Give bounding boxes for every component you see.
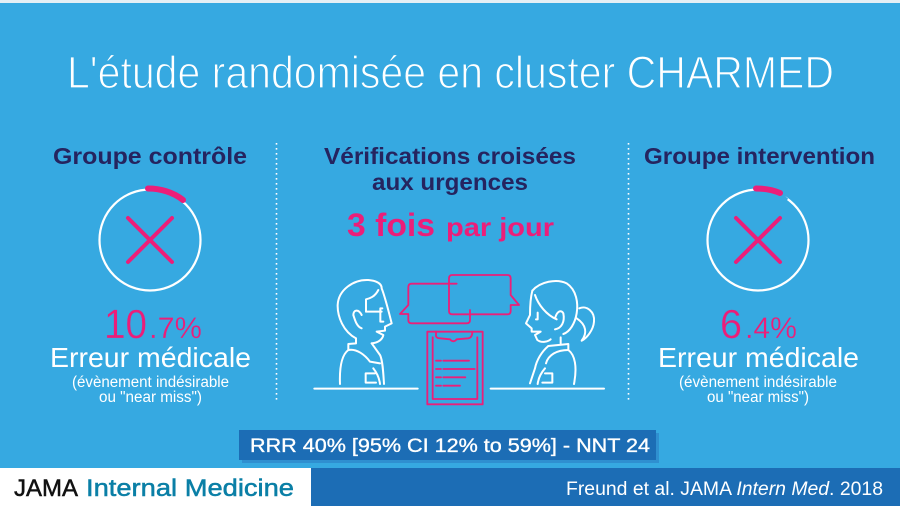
- stat: 6.4%: 6: [720, 301, 742, 347]
- note: adverse event or near miss: (évènement indésirable: [72, 374, 229, 391]
- stat: 10.7%: .7%: [149, 312, 202, 345]
- panel: cross-checks: [314, 143, 604, 404]
- heading: intervention group: Groupe intervention: [644, 143, 875, 169]
- note: adverse event or near miss: ou "near miss"): [707, 389, 809, 406]
- heading: cross-checks in the ED: Vérifications croisées: [324, 143, 576, 169]
- panel: control group: [50, 143, 251, 406]
- icon: intervention circle with cross: [708, 188, 808, 290]
- heading: cross-checks in the ED: aux urgences: [372, 169, 528, 195]
- journal name: JAMA: [14, 475, 78, 502]
- heading: control group: Groupe contrôle: [53, 143, 247, 169]
- note: adverse event or near miss: [679, 374, 837, 406]
- label: medical error: Erreur médicale: [50, 342, 251, 373]
- icon: female clinician: [491, 281, 604, 389]
- title: L'étude randomisée en cluster CHARMED: [67, 47, 834, 98]
- stat: 6.4%: .4%: [745, 312, 797, 345]
- note: adverse event or near miss: ou "near miss"): [99, 389, 202, 406]
- stat: 6.4%: [720, 301, 797, 347]
- icon: male clinician: [314, 280, 418, 389]
- note: adverse event or near miss: [72, 374, 229, 406]
- stat: 10.7%: 10: [104, 301, 147, 347]
- citation: Freund et al. JAMA Intern Med. 2018: [566, 479, 883, 500]
- journal name: Internal Medicine: [86, 475, 294, 502]
- frequency: 3 times a day: 3 fois: [347, 207, 435, 243]
- note: adverse event or near miss: (évènement indésirable: [679, 374, 837, 391]
- journal name: [14, 475, 294, 502]
- stat: 10.7%: [104, 301, 202, 347]
- icon: control circle with cross: [100, 188, 200, 290]
- callout: relative risk reduction: [239, 430, 659, 463]
- icon: left speech bubble: [400, 284, 470, 323]
- frequency: 3 times a day: par jour: [446, 212, 554, 242]
- footer bar: [0, 468, 900, 506]
- callout: relative risk reduction: RRR 40% [95% CI 12% to 59%] - NNT 24: [250, 436, 650, 457]
- panel: intervention group: [644, 143, 875, 406]
- icon: right speech bubble: [449, 275, 519, 314]
- heading: cross-checks in the ED: [324, 143, 576, 195]
- icon: clipboard: [427, 332, 483, 404]
- frequency: 3 times a day: [347, 207, 554, 243]
- illustration: two clinicians talking over a clipboard: [314, 275, 604, 404]
- label: medical error: Erreur médicale: [658, 342, 859, 373]
